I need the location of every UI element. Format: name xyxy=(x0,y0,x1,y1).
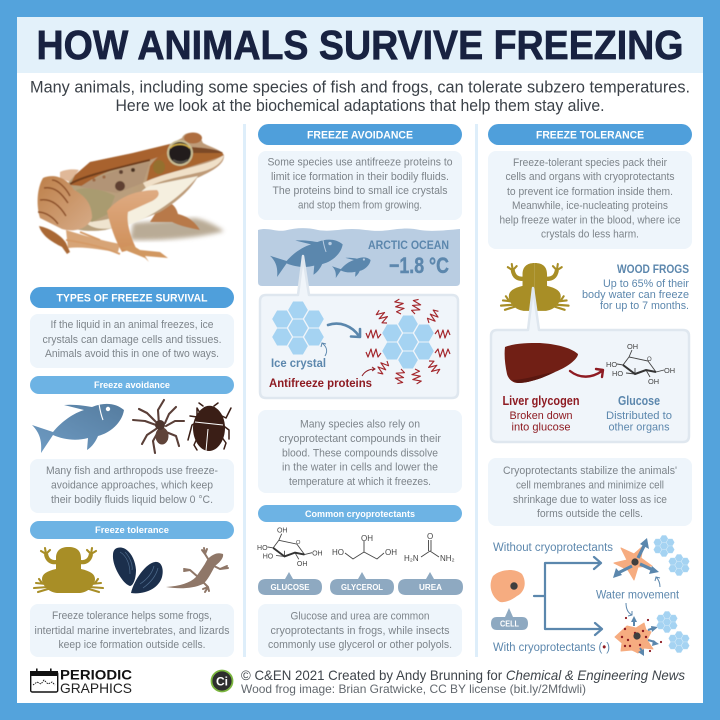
molecule: glucose: HO xyxy=(257,545,268,552)
icon: liver xyxy=(505,343,578,383)
label: glucose xyxy=(606,394,672,434)
column heading: freeze avoidance xyxy=(258,124,462,145)
tag: cell: CELL xyxy=(500,620,519,628)
molecule: glucose: HO xyxy=(263,553,274,560)
text block: cryoprotectants and ice-nucleating proteins: Freeze-tolerant species pack their xyxy=(513,157,667,169)
tag: glucose: GLUCOSE xyxy=(270,583,310,592)
text block: cell membranes: forms outside the cells. xyxy=(537,508,643,520)
label: liver glycogen: into glucose xyxy=(512,422,570,434)
molecule: glycerol: OH xyxy=(385,548,397,557)
tag: glycerol: GLYCEROL xyxy=(341,583,383,592)
arrow: glycogen to glucose xyxy=(570,369,603,377)
label: glucose: Distributed to xyxy=(606,410,672,422)
text block: cryoprotectants and ice-nucleating proteins xyxy=(488,151,692,249)
molecule: urea xyxy=(404,532,455,563)
arrow: binding xyxy=(328,324,360,337)
molecule: glucose: OH xyxy=(627,342,638,351)
tag: cell xyxy=(491,608,528,630)
label: glucose: Glucose xyxy=(618,394,660,408)
icon: cell xyxy=(491,570,525,602)
tag: glycerol xyxy=(330,572,394,595)
ice crystal with antifreeze proteins xyxy=(366,299,450,384)
pill heading: types of freeze survival: TYPES OF FREEZE SURVIVAL xyxy=(56,292,208,304)
text block: cryoprotectants and ice-nucleating proteins: crystals do less harm. xyxy=(541,228,639,240)
arrow: to upper water arrow xyxy=(655,577,660,587)
text block: antifreeze proteins: and stop them from growing. xyxy=(298,200,422,212)
arrow: to antifreeze proteins xyxy=(362,367,375,376)
molecule: glucose: OH xyxy=(312,551,323,558)
sub-heading: freeze tolerance: Freeze tolerance xyxy=(95,525,169,535)
icon: protected cell xyxy=(615,616,662,656)
icon: fish xyxy=(32,404,124,453)
icon: beetle xyxy=(188,403,231,451)
ice crystal xyxy=(272,301,324,355)
column dividers xyxy=(243,124,246,657)
label: water movement: Water movement xyxy=(596,590,680,602)
sub-heading: common cryoprotectants xyxy=(258,505,462,522)
molecule: glycerol: HO xyxy=(332,548,344,557)
icon: frog silhouette xyxy=(34,547,103,593)
arrow: to ice crystal xyxy=(321,343,327,356)
molecule: glucose: O xyxy=(647,357,652,363)
icon: spider xyxy=(133,400,184,453)
text block: common cryoprotectants: commonly use glycerol or other polyols. xyxy=(268,639,452,651)
molecule: glucose xyxy=(257,528,323,568)
icon: mussels xyxy=(113,548,163,593)
label: without cryoprotectants: Without cryoprotectants xyxy=(493,542,613,554)
logo: C&EN Ci: Ci xyxy=(216,674,228,688)
molecule: glucose: O xyxy=(296,540,301,546)
arrow: branching pathways xyxy=(534,557,602,635)
text block: freeze avoidance: Many fish and arthropods use freeze- xyxy=(46,465,218,477)
intro text: Here we look at the biochemical adaptations that help them stay alive. xyxy=(116,96,604,115)
text block: freeze avoidance: avoidance approaches, which keep xyxy=(51,480,213,492)
molecule: glycerol: OH xyxy=(361,534,373,543)
text block: intro to freeze survival: Animals avoid this in one of two ways. xyxy=(45,348,219,360)
label: arctic ocean: ARCTIC OCEAN xyxy=(368,238,449,252)
credits: © C&EN 2021 Created by Andy Brunning for Chemical & Engineering News xyxy=(241,667,685,683)
text block: intro to freeze survival: If the liquid in an animal freezes, ice xyxy=(50,319,214,331)
text block: cryoprotectants and ice-nucleating proteins: cells and organs with cryoprotectants xyxy=(506,171,674,183)
molecule: glucose: OH xyxy=(277,528,287,535)
logo: periodic graphics xyxy=(30,668,132,696)
text block: cryoprotectant compounds: blood. These compounds dissolve xyxy=(282,448,438,460)
panel: arctic ocean xyxy=(258,228,460,286)
column heading: freeze tolerance: FREEZE TOLERANCE xyxy=(536,130,644,142)
text block: cryoprotectant compounds: in the water in cells and lower the xyxy=(282,462,438,474)
molecule: glucose: HO xyxy=(606,360,617,369)
label: glucose: other organs xyxy=(608,422,670,434)
callout: wood frogs fact: body water can freeze xyxy=(582,289,689,301)
arrow: to lower water arrow xyxy=(626,603,632,616)
text block: cryoprotectants and ice-nucleating proteins: Meanwhile, ice-nucleating proteins xyxy=(512,200,668,212)
molecule: glucose: OH xyxy=(297,561,307,568)
text block: cell membranes: cell membranes and minimize cell xyxy=(516,480,664,492)
sub-heading: freeze avoidance xyxy=(30,376,234,394)
intro text: Many animals, including some species of fish and frogs, can tolerate subzero temperatures. xyxy=(30,78,690,96)
molecule: glucose xyxy=(606,342,675,386)
molecule: glucose: OH xyxy=(664,366,675,375)
callout: wood frogs fact xyxy=(582,264,689,312)
text block: antifreeze proteins: limit ice formation in their bodily fluids. xyxy=(271,171,449,183)
molecule: urea: O xyxy=(427,532,433,541)
ice crystals: lower right xyxy=(668,631,690,653)
molecule: urea: NH₂ xyxy=(440,554,455,563)
text block: cell membranes: Cryoprotectants stabilize the animals' xyxy=(503,465,677,477)
callout: wood frogs fact: WOOD FROGS xyxy=(617,264,689,276)
intro text xyxy=(30,78,690,115)
panel: ice crystal diagram xyxy=(260,256,458,398)
pill heading: types of freeze survival xyxy=(30,287,234,308)
ice crystals: lower xyxy=(656,611,678,633)
sub-heading: freeze tolerance xyxy=(30,521,234,539)
text block: cell membranes: shrinkage due to water loss as ice xyxy=(513,494,667,506)
ice crystals: upper xyxy=(653,535,675,557)
text block: freeze tolerance xyxy=(30,604,234,657)
molecule: glucose: OH xyxy=(648,377,659,386)
text block: cryoprotectant compounds: cryoprotectant compounds in their xyxy=(279,433,441,445)
credits: Wood frog image: Brian Gratwicke, CC BY license (bit.ly/2Mfdwli) xyxy=(241,682,586,696)
text block: freeze tolerance: keep ice formation outside cells. xyxy=(58,639,206,651)
label: with cryoprotectants: With cryoprotectants (•) xyxy=(493,642,610,654)
tag: glucose xyxy=(258,572,322,595)
icon: small fish xyxy=(332,257,371,278)
text block: cryoprotectants and ice-nucleating proteins: to prevent ice formation inside them. xyxy=(507,186,673,198)
text block: antifreeze proteins: The proteins bind to small ice crystals xyxy=(272,185,448,197)
logo: periodic graphics: GRAPHICS xyxy=(60,680,132,696)
sub-heading: freeze avoidance: Freeze avoidance xyxy=(94,380,170,390)
label: ice crystal: Ice crystal xyxy=(271,358,326,370)
text block: common cryoprotectants: Glucose and urea are common xyxy=(290,610,430,622)
text block: freeze tolerance: intertidal marine invertebrates, and lizards xyxy=(34,625,230,637)
logo: periodic graphics: PERIODIC xyxy=(60,668,132,682)
text block: cryoprotectant compounds xyxy=(258,410,462,493)
icon: large fish xyxy=(270,240,343,277)
text block: common cryoprotectants xyxy=(258,604,462,657)
logo: C&EN Ci xyxy=(212,670,232,692)
text block: freeze tolerance: Freeze tolerance helps some frogs, xyxy=(52,610,212,622)
molecule: urea: H₂N xyxy=(404,554,419,563)
text block: antifreeze proteins: Some species use antifreeze proteins to xyxy=(268,156,453,168)
callout: wood frogs fact: for up to 7 months. xyxy=(600,300,689,312)
section: types of freeze survival xyxy=(30,287,234,368)
icon: shrunken cell xyxy=(613,538,659,580)
diagram: cell shrinkage xyxy=(491,535,690,656)
label: temperature: −1.8 °C xyxy=(389,253,449,278)
tag: urea: UREA xyxy=(419,583,442,592)
text block: intro to freeze survival xyxy=(30,314,234,368)
text block: common cryoprotectants: cryoprotectants in frogs, while insects xyxy=(270,625,450,637)
text block: antifreeze proteins xyxy=(258,151,462,220)
molecule: glucose: HO xyxy=(612,369,623,378)
label: liver glycogen: Broken down xyxy=(510,410,572,422)
column heading: freeze avoidance: FREEZE AVOIDANCE xyxy=(307,130,413,142)
text block: cell membranes xyxy=(488,458,692,526)
text block: cryoprotectants and ice-nucleating proteins: help freeze water in the blood, where ice xyxy=(500,214,681,226)
text block: intro to freeze survival: crystals can damage cells and tissues. xyxy=(42,334,222,346)
ice crystals: upper right xyxy=(668,554,690,576)
text block: freeze avoidance: their bodily fluids liquid below 0 °C. xyxy=(51,494,213,506)
callout box xyxy=(491,288,689,442)
label: antifreeze proteins: Antifreeze proteins xyxy=(269,378,372,390)
icon: lizard xyxy=(166,548,228,592)
text block: cryoprotectant compounds: temperature at which it freezes. xyxy=(289,476,431,488)
column heading: freeze tolerance xyxy=(488,124,692,145)
text block: freeze avoidance xyxy=(30,459,234,513)
icon: wood frog xyxy=(501,263,569,311)
tag: urea xyxy=(398,572,463,595)
sub-heading: common cryoprotectants: Common cryoprotectants xyxy=(305,509,415,519)
text block: cryoprotectant compounds: Many species also rely on xyxy=(300,418,420,430)
credits xyxy=(241,667,685,696)
label: liver glycogen xyxy=(502,394,580,434)
label: liver glycogen: Liver glycogen xyxy=(502,394,580,408)
photo: wood frog xyxy=(38,132,224,262)
panel: wood frog liver diagram xyxy=(491,263,689,442)
callout: wood frogs fact: Up to 65% of their xyxy=(603,278,689,290)
molecule: glycerol xyxy=(332,534,397,559)
